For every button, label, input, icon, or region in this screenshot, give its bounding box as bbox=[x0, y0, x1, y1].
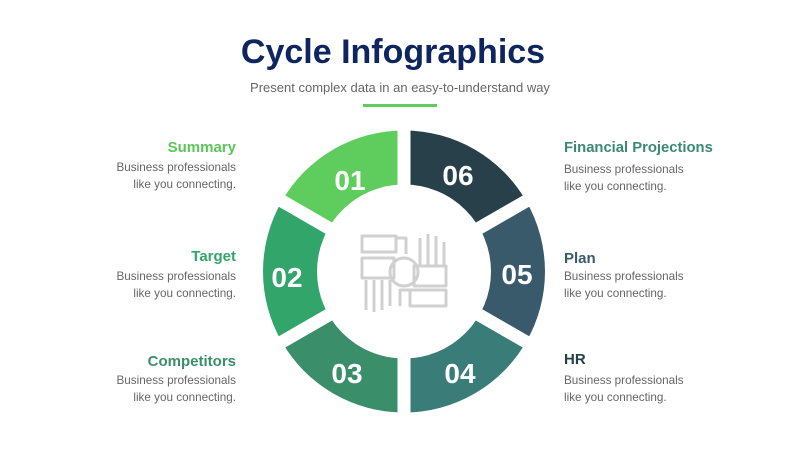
label: HR: like you connecting. bbox=[564, 391, 667, 404]
icon: hands bbox=[362, 234, 446, 312]
label: Financial Projections bbox=[564, 140, 713, 193]
segment numbers: 02 bbox=[271, 262, 303, 293]
accent line bbox=[363, 104, 437, 107]
label: Summary: Business professionals bbox=[116, 161, 236, 174]
label: Plan: Plan bbox=[564, 250, 596, 267]
cycle diagram bbox=[263, 122, 545, 422]
label: Plan: Business professionals bbox=[564, 270, 684, 283]
label: Financial Projections: Business professionals bbox=[564, 163, 684, 176]
segment numbers: 05 bbox=[501, 259, 533, 290]
segment numbers: 03 bbox=[331, 358, 363, 389]
segment numbers: 04 bbox=[444, 358, 476, 389]
label: Competitors: like you connecting. bbox=[133, 391, 236, 404]
label: Target: like you connecting. bbox=[133, 287, 236, 300]
segment numbers: 01 bbox=[334, 165, 366, 196]
label: Plan bbox=[564, 250, 684, 300]
label: Target: Target bbox=[191, 248, 236, 265]
label: Financial Projections: like you connecting. bbox=[564, 180, 667, 193]
label: Target: Business professionals bbox=[116, 270, 236, 283]
segment numbers bbox=[271, 160, 533, 389]
label: Summary bbox=[116, 139, 237, 191]
subtitle: Present complex data in an easy-to-understand way bbox=[250, 80, 550, 95]
label: Financial Projections: Financial Projections bbox=[564, 140, 713, 156]
right labels bbox=[564, 140, 713, 404]
label: Summary: like you connecting. bbox=[133, 178, 236, 191]
label: Competitors: Business professionals bbox=[116, 374, 236, 387]
label: Plan: like you connecting. bbox=[564, 287, 667, 300]
label: Summary: Summary bbox=[168, 139, 237, 156]
title: Cycle Infographics bbox=[241, 33, 545, 71]
label: HR: Business professionals bbox=[564, 374, 684, 387]
label: HR: HR bbox=[564, 351, 586, 368]
label: HR bbox=[564, 351, 684, 404]
left labels bbox=[116, 139, 237, 404]
label: Competitors bbox=[116, 353, 236, 404]
label: Target bbox=[116, 248, 236, 300]
segment numbers: 06 bbox=[442, 160, 474, 191]
label: Competitors: Competitors bbox=[148, 353, 236, 370]
